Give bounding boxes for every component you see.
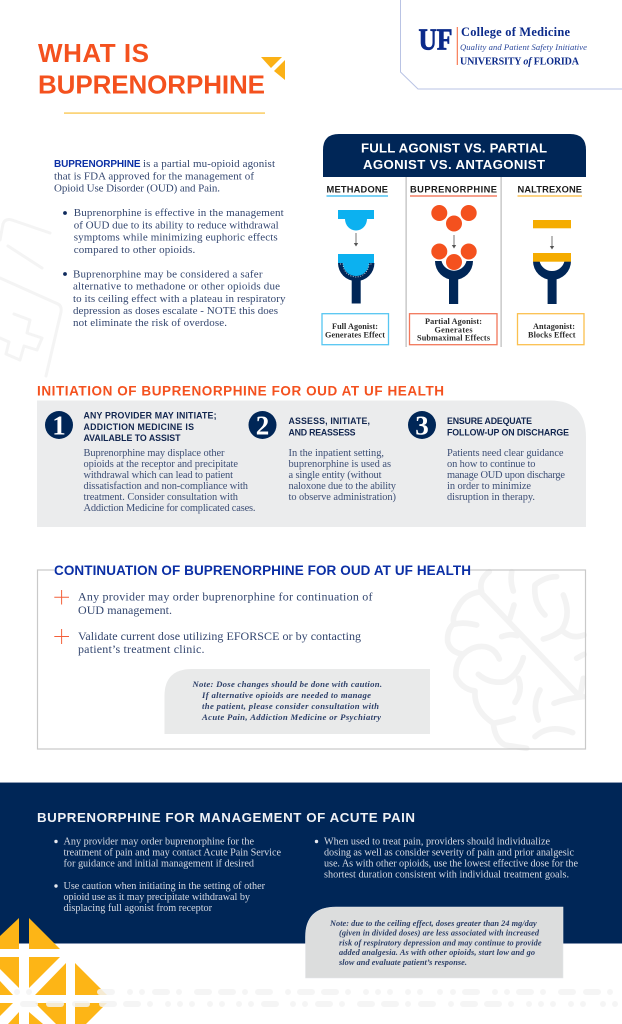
panel: initiation steps bbox=[37, 400, 586, 527]
bullet: individualize dosing: When used to treat pain, providers should individualize bbox=[324, 836, 550, 847]
panel header: FULL AGONIST VS. PARTIAL bbox=[361, 140, 547, 156]
bullet: any provider pain: Any provider may order buprenorphine for the bbox=[64, 836, 254, 848]
bullet: use caution: displacing full agonist from receptor bbox=[64, 903, 213, 914]
bullet: safer alternative: depression as doses escalate - NOTE this does bbox=[73, 305, 278, 317]
bullet: use caution bbox=[54, 881, 266, 914]
title: WHAT IS bbox=[38, 38, 149, 68]
decoration: gold triangles bbox=[0, 918, 107, 1024]
bullet: use caution: opioid use as it may precipitate withdrawal by bbox=[64, 892, 251, 903]
step 3: in order to minimize bbox=[447, 481, 531, 492]
bullet: any provider pain bbox=[54, 836, 281, 870]
intro text bbox=[54, 158, 286, 329]
bullet: safer alternative bbox=[63, 268, 286, 329]
step 2: to observe administration) bbox=[288, 492, 396, 503]
logo mark: UF: UF bbox=[418, 22, 452, 56]
bullet: effective in management: compared to other opioids. bbox=[74, 244, 195, 256]
note: ceiling effect bbox=[306, 907, 563, 978]
step 1: Addiction Medicine for complicated cases. bbox=[84, 503, 256, 514]
note: ceiling effect: risk of respiratory depression and may continue to provide bbox=[339, 938, 542, 947]
heading: continuation: CONTINUATION OF BUPRENORPHINE FOR OUD AT UF HEALTH bbox=[54, 563, 471, 578]
bullet: individualize dosing: use. As with other opioids, use the lowest effective dose for the bbox=[324, 858, 578, 869]
panel: agonist comparison bbox=[322, 134, 586, 347]
note: ceiling effect: added analgesia. As with other opioids, start low and go bbox=[339, 948, 535, 957]
logo panel: Quality and Patient Safety Initiative bbox=[460, 42, 587, 52]
step 2: 2 bbox=[256, 410, 269, 440]
caption: antagonist bbox=[518, 314, 584, 345]
note: ceiling effect: (given in divided doses) are less associated with increased bbox=[339, 929, 540, 938]
logo panel bbox=[400, 0, 622, 89]
step 1: ANY PROVIDER MAY INITIATE; bbox=[84, 410, 217, 420]
step 2: a single entity (without bbox=[288, 470, 382, 481]
bullet: effective in management: Buprenorphine is effective in the management bbox=[74, 207, 284, 219]
step 1: treatment. Consider consultation with bbox=[84, 492, 239, 503]
note: ceiling effect: slow and evaluate patient’s response. bbox=[338, 958, 467, 967]
step 2: ASSESS, INITIATE, bbox=[288, 416, 370, 426]
caption: antagonist: Antagonist: bbox=[533, 322, 575, 331]
logo panel: College of Medicine bbox=[461, 25, 570, 39]
caption: partial agonist: Submaximal Effects bbox=[417, 334, 490, 342]
bullet: use caution: Use caution when initiating in the setting of other bbox=[64, 881, 266, 892]
intro text: BUPRENORPHINE bbox=[54, 159, 141, 170]
bullet: effective in management bbox=[63, 207, 284, 256]
bullet: validate dose bbox=[54, 629, 361, 656]
column label: buprenorphine: BUPRENORPHINE bbox=[410, 184, 497, 194]
step 1: ADDICTION MEDICINE IS bbox=[84, 422, 194, 432]
diagram: methadone full agonist bbox=[338, 210, 374, 304]
panel: continuation bbox=[38, 563, 586, 749]
step 3 bbox=[408, 410, 569, 503]
panel header bbox=[323, 134, 586, 177]
note: dose changes: Acute Pain, Addiction Medicine or Psychiatry bbox=[201, 712, 381, 722]
bullet: any provider: Any provider may order buprenorphine for continuation of bbox=[78, 590, 372, 604]
step 3: FOLLOW-UP ON DISCHARGE bbox=[447, 428, 569, 438]
intro text: is a partial mu-opioid agonist bbox=[143, 158, 275, 170]
bullet: any provider pain: for guidance and initial management if desired bbox=[64, 858, 254, 870]
note: dose changes: If alternative opioids are needed to manage bbox=[201, 690, 371, 700]
step 1: dissatisfaction and non-compliance with bbox=[84, 481, 249, 492]
step 1 bbox=[45, 410, 256, 514]
heading: initiation: INITIATION OF BUPRENORPHINE FOR OUD AT UF HEALTH bbox=[37, 384, 444, 398]
note: ceiling effect: Note: due to the ceiling effect, doses greater than 24 mg/day bbox=[329, 919, 537, 928]
bullet: individualize dosing: shortest duration consistent with individual treatment goals. bbox=[324, 869, 569, 880]
background icon: brain bbox=[448, 572, 584, 748]
bullet: safer alternative: Buprenorphine may be considered a safer bbox=[73, 268, 263, 280]
column label: methadone: METHADONE bbox=[326, 184, 388, 194]
step 3: disruption in therapy. bbox=[447, 492, 535, 503]
panel header: AGONIST VS. ANTAGONIST bbox=[363, 157, 545, 172]
caption: partial agonist: Partial Agonist: bbox=[425, 317, 482, 326]
decoration: dotted pill pattern bbox=[14, 989, 618, 1007]
caption: antagonist: Blocks Effect bbox=[528, 330, 576, 340]
intro text: Opioid Use Disorder (OUD) and Pain. bbox=[54, 182, 220, 194]
step 2: In the inpatient setting, bbox=[288, 448, 384, 459]
bullet: any provider pain: treatment of pain and may contact Acute Pain Service bbox=[64, 848, 281, 858]
bullet: validate dose: patient’s treatment clinic. bbox=[78, 642, 204, 656]
note: dose changes bbox=[164, 669, 430, 734]
step 2: buprenorphine is used as bbox=[288, 459, 391, 470]
step 1: opioids at the receptor and precipitate bbox=[84, 459, 238, 470]
step 1: withdrawal which can lead to patient bbox=[84, 470, 233, 481]
bullet: individualize dosing bbox=[315, 836, 578, 880]
column label: naltrexone: NALTREXONE bbox=[518, 184, 582, 194]
step 3: 3 bbox=[415, 410, 429, 440]
bullet: safer alternative: not eliminate the risk of overdose. bbox=[73, 317, 227, 329]
title: BUPRENORPHINE bbox=[38, 70, 265, 100]
title underline bbox=[64, 112, 265, 114]
diagram: naltrexone antagonist bbox=[533, 220, 571, 304]
caption: full agonist bbox=[322, 314, 388, 345]
bullet: individualize dosing: dosing as well as consider severity of pain and prior analgesic bbox=[324, 847, 574, 858]
step 3: manage OUD upon discharge bbox=[447, 470, 565, 481]
bullet: effective in management: of OUD due to its ability to reduce withdrawal bbox=[74, 219, 279, 231]
background icon: medicine bottle bbox=[0, 220, 61, 376]
bullet: safer alternative: to its ceiling effect with a plateau in respiratory bbox=[73, 293, 286, 305]
caption: partial agonist: Generates bbox=[434, 325, 472, 334]
step 3: ENSURE ADEQUATE bbox=[447, 416, 532, 426]
step 3: Patients need clear guidance bbox=[447, 448, 564, 459]
caption: full agonist: Generates Effect bbox=[325, 330, 385, 340]
bullet: any provider: OUD management. bbox=[78, 603, 172, 617]
step 3: on how to continue to bbox=[447, 459, 536, 470]
caption: full agonist: Full Agonist: bbox=[332, 322, 378, 331]
bullet: any provider bbox=[54, 590, 373, 617]
note: dose changes: the patient, please consider consultation with bbox=[202, 701, 379, 711]
intro text: that is FDA approved for the management of bbox=[54, 170, 254, 182]
step 2: AND REASSESS bbox=[288, 428, 356, 438]
step 1: AVAILABLE TO ASSIST bbox=[84, 433, 181, 443]
heading: acute pain: BUPRENORPHINE FOR MANAGEMENT OF ACUTE PAIN bbox=[37, 810, 415, 825]
icon: title corner triangles bbox=[261, 57, 285, 80]
step 1: 1 bbox=[52, 410, 66, 440]
step 2: naloxone due to the ability bbox=[288, 481, 397, 492]
note: dose changes: Note: Dose changes should be done with caution. bbox=[192, 679, 382, 689]
step 2 bbox=[248, 410, 397, 503]
bullet: validate dose: Validate current dose utilizing EFORSCE or by contacting bbox=[78, 629, 361, 643]
logo panel: UNIVERSITY of FLORIDA bbox=[460, 56, 580, 68]
title bbox=[38, 38, 265, 100]
bullet: effective in management: symptoms while minimizing euphoric effects bbox=[74, 232, 278, 244]
caption: partial agonist bbox=[410, 314, 497, 345]
step 1: Buprenorphine may displace other bbox=[84, 448, 225, 459]
panel: acute pain bbox=[0, 782, 622, 944]
diagram: buprenorphine partial agonist bbox=[431, 205, 477, 304]
bullet: safer alternative: alternative to methadone or other opioids due bbox=[73, 281, 280, 293]
